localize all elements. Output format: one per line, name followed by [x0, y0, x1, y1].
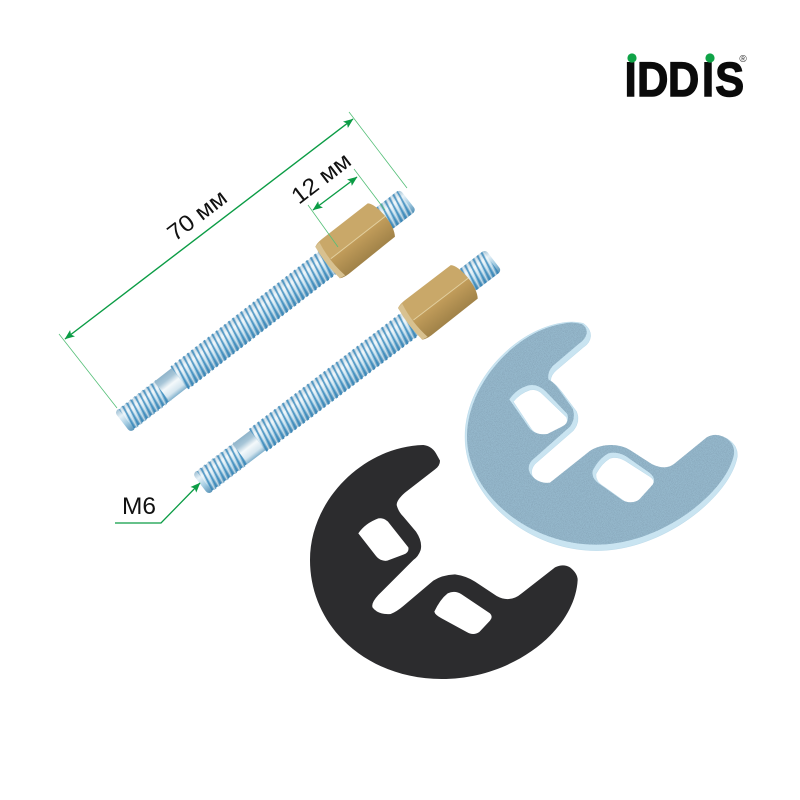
- steel washer edge: [465, 322, 737, 551]
- 12 mm extension lines: [308, 169, 385, 247]
- registered mark: ®: [739, 54, 747, 65]
- bolt 2 end thread: [458, 249, 502, 292]
- logo wordmark: IDDIS: [625, 53, 744, 107]
- rubber washer: [310, 445, 578, 679]
- M6 leader arrow: [115, 483, 200, 523]
- 12 mm label: 12 мм: [286, 147, 356, 209]
- logo green dot left: [627, 53, 637, 63]
- bolt 2 tip thread: [193, 442, 250, 495]
- bolt 2 smooth shank: [233, 429, 267, 464]
- steel washer: [465, 322, 737, 551]
- callout: M6: [115, 483, 200, 523]
- bolt 2 main thread: [249, 307, 425, 452]
- 12 mm arrow: [313, 177, 357, 210]
- logo: IDDIS: [625, 53, 747, 107]
- M6 label: M6: [122, 493, 156, 520]
- bolt 2 with brass nut: [187, 243, 507, 502]
- bolt 1 tip thread: [114, 380, 171, 432]
- bolt 2 brass nut: [396, 261, 482, 342]
- steel washer face: [467, 323, 734, 545]
- 70 mm label: 70 мм: [162, 184, 232, 246]
- bolt 1 main thread: [170, 246, 343, 389]
- dimension: 70 mm: [59, 112, 407, 408]
- bolt 1 with brass nut: [109, 182, 422, 440]
- bolt 1 end thread: [375, 189, 416, 230]
- bolt 1 smooth shank: [154, 367, 188, 401]
- 70 mm extension lines: [59, 112, 407, 408]
- dimension: 12 mm: [286, 147, 385, 247]
- rubber washer body: [310, 445, 578, 679]
- logo green dot right: [705, 53, 715, 63]
- 70 mm arrow: [65, 119, 353, 339]
- bolt 1 brass nut: [313, 200, 399, 281]
